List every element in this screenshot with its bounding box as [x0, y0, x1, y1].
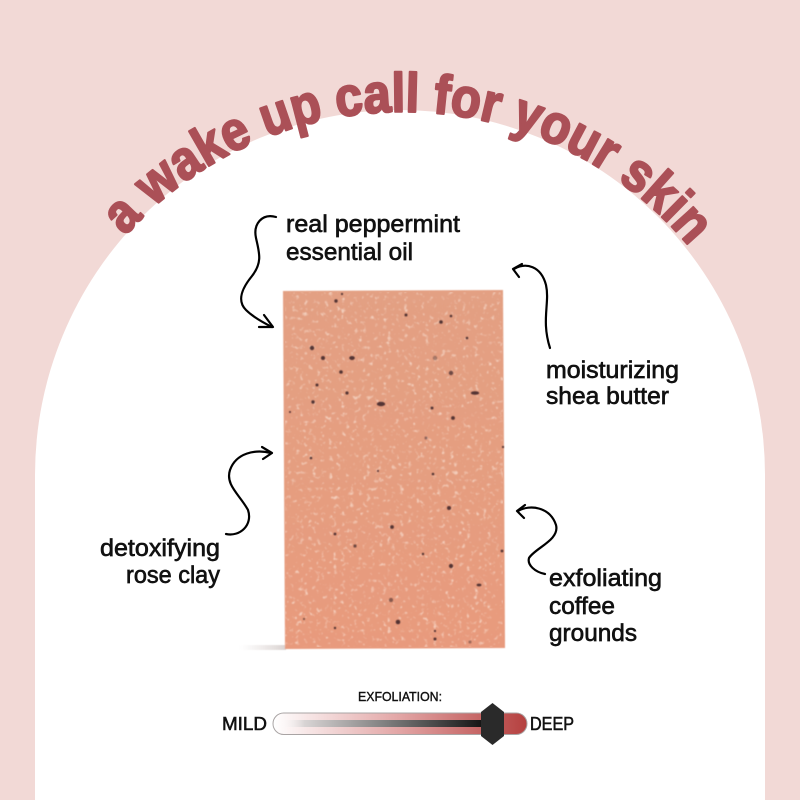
- slider inner bar: [280, 720, 485, 727]
- label: detoxifying rose clay: rose clay: [126, 562, 220, 589]
- soap bar: [240, 290, 505, 650]
- label: real peppermint essential oil: [286, 211, 460, 266]
- label: detoxifying rose clay: detoxifying: [100, 535, 220, 562]
- slider handle: [481, 703, 504, 745]
- exfoliation scale: [222, 689, 574, 745]
- label: real peppermint essential oil: essential oil: [286, 239, 413, 266]
- arrow: to right of soap: [517, 505, 556, 574]
- mild label: MILD: [222, 714, 267, 734]
- arrow: to left of soap: [226, 447, 272, 534]
- label: moisturizing shea butter: [546, 357, 679, 410]
- label: moisturizing shea butter: shea butter: [546, 383, 669, 410]
- label: exfoliating coffee grounds: exfoliating: [549, 565, 662, 592]
- label: detoxifying rose clay: [100, 535, 220, 589]
- arrow: to top left of soap: [241, 216, 276, 327]
- deep label: DEEP: [530, 714, 574, 734]
- scale heading: EXFOLIATION:: [358, 689, 442, 704]
- label: exfoliating coffee grounds: [549, 565, 662, 647]
- label: exfoliating coffee grounds: coffee: [549, 593, 615, 620]
- arrow: to top right of soap: [513, 264, 550, 348]
- label: real peppermint essential oil: real peppermint: [286, 211, 460, 238]
- label: moisturizing shea butter: moisturizing: [546, 357, 679, 384]
- white arch panel: [35, 110, 765, 800]
- slider track: [273, 713, 527, 734]
- label: exfoliating coffee grounds: grounds: [549, 620, 637, 647]
- soap speckles: [289, 293, 504, 644]
- title: a wake up call for your skin: [108, 70, 707, 246]
